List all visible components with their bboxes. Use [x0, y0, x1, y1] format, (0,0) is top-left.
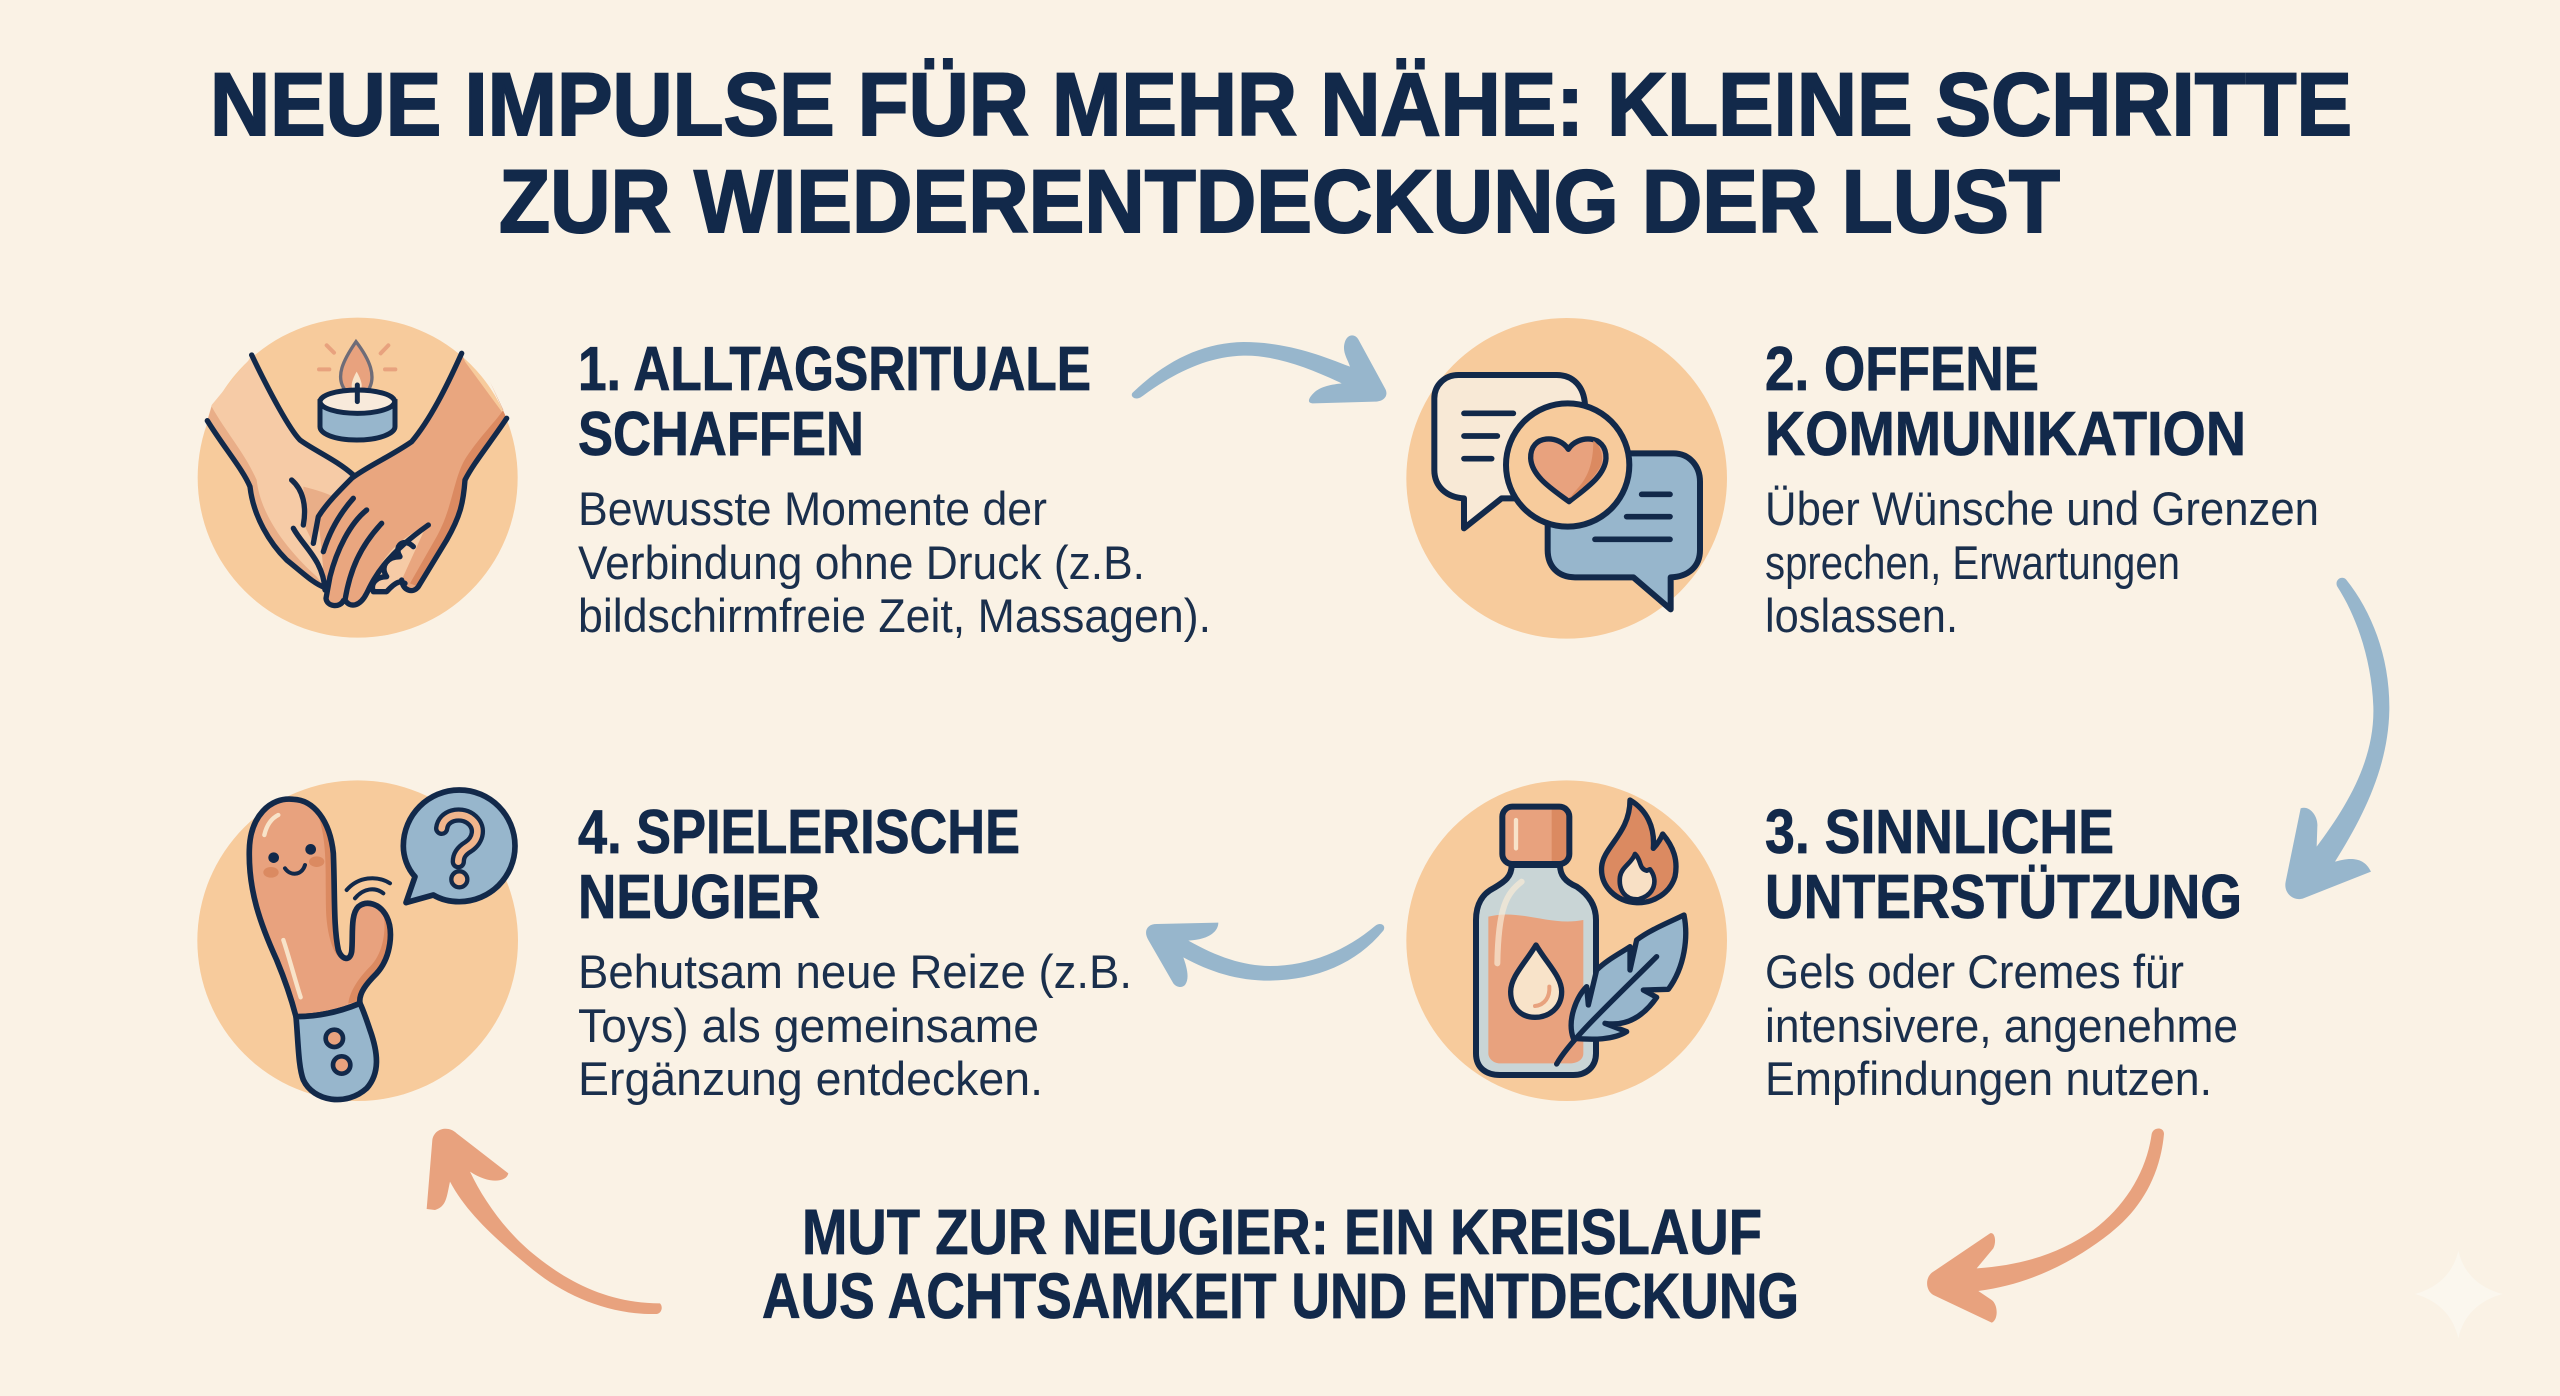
title — [210, 54, 2352, 251]
arrow: footer to step 4 — [427, 1129, 662, 1314]
text: step 3 description: intensivere, angenehme — [1765, 999, 2238, 1052]
heading: step 2 — [1765, 335, 2246, 469]
text: step 3 description: Empfindungen nutzen. — [1765, 1052, 2212, 1105]
title: NEUE IMPULSE FÜR MEHR NÄHE: KLEINE SCHRITTE — [210, 54, 2352, 154]
heading: step 4 — [578, 798, 1020, 932]
text: step 2 description: sprechen, Erwartungen — [1765, 536, 2180, 589]
icon: bottle, flame and feather — [1406, 780, 1727, 1101]
panel: step 3 — [1406, 780, 2242, 1105]
heading: step 2: 2. OFFENE — [1765, 335, 2039, 404]
panel: step 1 — [198, 318, 1211, 642]
title: ZUR WIEDERENTDECKUNG DER LUST — [499, 151, 2060, 251]
text: step 2 description: Über Wünsche und Grenzen — [1765, 482, 2319, 535]
heading: step 4: 4. SPIELERISCHE — [578, 798, 1020, 867]
icon: speech bubbles with heart — [1406, 318, 1727, 639]
text: step 2 description: loslassen. — [1765, 589, 1958, 642]
heading: step 1: SCHAFFEN — [578, 400, 864, 469]
text: step 4 description — [578, 945, 1132, 1105]
text: step 1 description — [578, 482, 1211, 642]
heading: step 1 — [578, 335, 1091, 469]
icon: holding hands and candle — [198, 318, 518, 638]
text: step 2 description — [1765, 482, 2319, 642]
text: step 1 description: Verbindung ohne Druck (z.B. — [578, 536, 1145, 589]
panel: step 4 — [197, 780, 1132, 1105]
heading: step 2: KOMMUNIKATION — [1765, 400, 2246, 469]
arrow: step 3 to footer — [1927, 1128, 2164, 1323]
icon: sparkle watermark — [2415, 1251, 2503, 1338]
footer message: MUT ZUR NEUGIER: EIN KREISLAUF — [802, 1196, 1762, 1268]
text: step 4 description: Toys) als gemeinsame — [578, 999, 1039, 1052]
panel: step 2 — [1406, 318, 2319, 642]
heading: step 3: 3. SINNLICHE — [1765, 798, 2114, 867]
heading: step 3 — [1765, 798, 2242, 932]
icon: playful toy with question bubble — [197, 780, 518, 1101]
arrow: step 2 to 3 — [2285, 578, 2389, 899]
text: step 1 description: bildschirmfreie Zeit, Massagen). — [578, 589, 1211, 642]
heading: step 3: UNTERSTÜTZUNG — [1765, 863, 2242, 932]
text: step 4 description: Ergänzung entdecken. — [578, 1052, 1043, 1105]
heading: step 4: NEUGIER — [578, 863, 820, 932]
arrow: step 1 to 2 — [1132, 335, 1386, 403]
text: step 3 description — [1765, 945, 2238, 1105]
text: step 4 description: Behutsam neue Reize (z.B. — [578, 945, 1132, 998]
text: step 1 description: Bewusste Momente der — [578, 482, 1047, 535]
footer message — [762, 1196, 1799, 1332]
arrow: step 3 to 4 — [1146, 923, 1384, 987]
footer message: AUS ACHTSAMKEIT UND ENTDECKUNG — [762, 1260, 1799, 1332]
text: step 3 description: Gels oder Cremes für — [1765, 945, 2184, 998]
heading: step 1: 1. ALLTAGSRITUALE — [578, 335, 1091, 404]
